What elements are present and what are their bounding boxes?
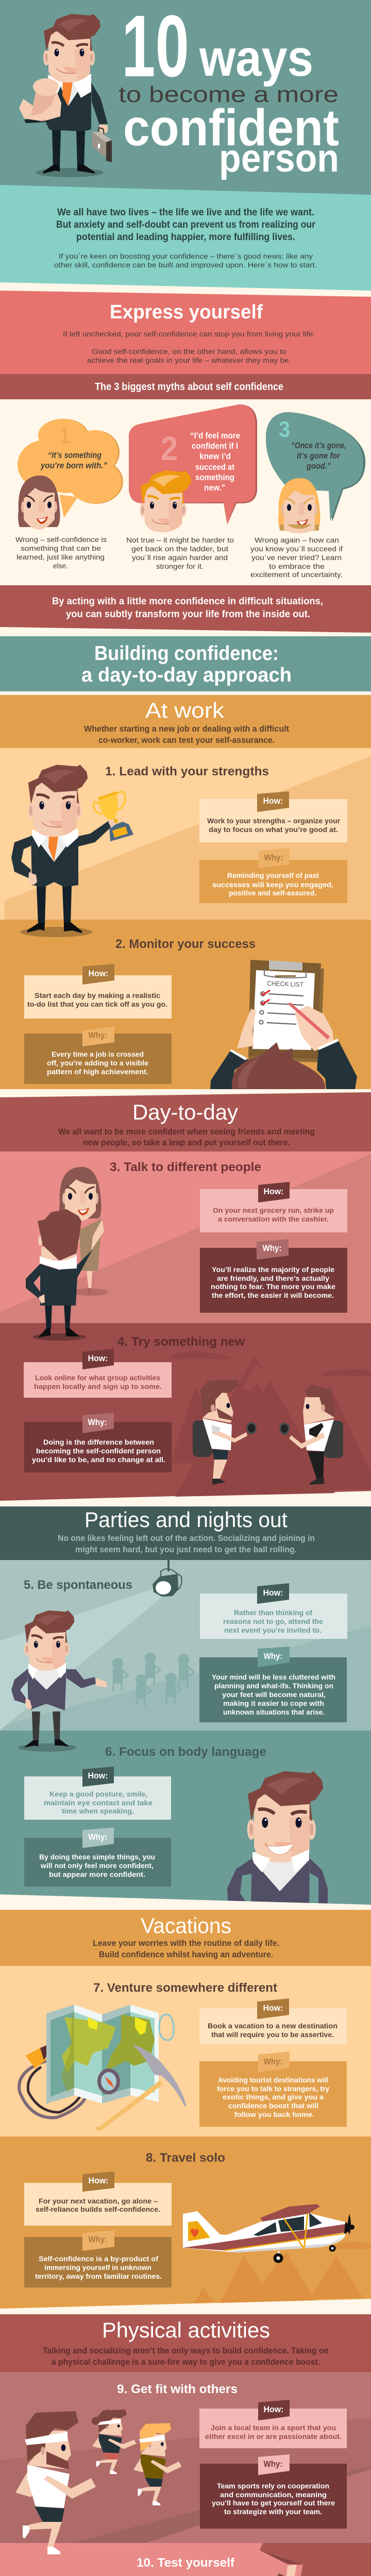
tip 1 why card: positive and self-assured. — [229, 889, 316, 897]
tip 4 why card: you’d like to be, and no change at all. — [32, 1455, 165, 1464]
myth 1 rebuttal — [15, 535, 107, 570]
tip 1 how card: How: — [263, 796, 283, 806]
tip 8 why card: territory, away from familiar routines. — [35, 2272, 162, 2280]
panel: express yourself — [0, 291, 371, 374]
tip 2 why card: Every time a job is crossed — [52, 1050, 144, 1058]
tip 5 why card: making it easier to cope with — [223, 1699, 324, 1707]
illustration: second hiker with compass — [279, 1385, 343, 1485]
section header: physical activities: Physical activities — [102, 2318, 270, 2342]
tip 10 heading: 10. Test yourself — [137, 2556, 235, 2570]
tip 7 how card: Book a vacation to a new destination — [208, 2022, 338, 2030]
tip 5 why card: your feet will become natural, — [222, 1690, 326, 1699]
tip 6 how card: maintain eye contact and take — [44, 1799, 153, 1807]
tip 6 why card: will not only feel more confident, — [40, 1861, 154, 1870]
tip 5 how card: Rather than thinking of — [234, 1608, 312, 1617]
speech bubble 2 — [129, 404, 257, 524]
mountains backdrop — [170, 1351, 371, 1497]
tip 1 why card — [199, 848, 347, 903]
section header: day-to-day: new people, so take a leap and put yourself out there. — [83, 1138, 290, 1147]
tip 9 how card — [199, 2400, 347, 2448]
tip 7 how card — [199, 1998, 347, 2044]
tip 2 why card: Why: — [89, 1030, 107, 1040]
title: confident — [123, 99, 339, 157]
cliff — [260, 2543, 371, 2576]
tip 7 how card: that will require you to be assertive. — [211, 2030, 334, 2039]
section header: vacations — [0, 1910, 371, 1966]
speech bubble 3: “Once it’s gone, — [291, 440, 346, 450]
intro body text — [54, 252, 317, 269]
speech bubble 2: “I’d feel more — [190, 431, 240, 440]
intro lead text: But anxiety and self-doubt can prevent us from realizing our — [56, 219, 316, 230]
hero businessman pointing — [19, 14, 108, 177]
panel: tip 5 be spontaneous — [0, 1560, 371, 1731]
mountains backdrop — [194, 2242, 371, 2303]
tip 1 why card: Why: — [264, 853, 283, 862]
tip 2 why card: off, you’re adding to a visible — [47, 1059, 148, 1067]
myth 2 rebuttal: stronger for it. — [156, 562, 204, 570]
tip 4 why card: Why: — [88, 1417, 107, 1427]
tip 2 how card — [24, 964, 172, 1019]
tip 4 how card: Look online for what group activities — [35, 1374, 160, 1382]
tip 3 how card — [200, 1182, 347, 1232]
speech bubble 3: 3 — [279, 417, 290, 442]
tip 5 how card: How: — [263, 1588, 283, 1598]
tip 3 why card: are friendly, and there’s actually — [217, 1274, 329, 1282]
myth 1 rebuttal: something that can be — [21, 544, 101, 552]
title: 10 — [122, 0, 189, 95]
myth 3 rebuttal: excitement of uncertainty. — [250, 570, 343, 579]
panel: hero — [0, 0, 371, 196]
section header: at work — [0, 695, 371, 748]
face: redhead man — [140, 470, 192, 532]
tip 9 how card: Join a local team in a sport that you — [211, 2424, 336, 2432]
speech bubble 3: good.” — [306, 461, 331, 471]
title: to become a more — [119, 82, 339, 107]
section header: day-to-day: We all want to be more confident when seeing friends and meeting — [58, 1127, 315, 1137]
tip 8 how card — [24, 2172, 172, 2226]
myth 3 rebuttal — [250, 536, 343, 579]
tip 2 how card: to-do list that you can tick off as you go. — [27, 1000, 167, 1008]
illustration: small airplane — [183, 2204, 355, 2263]
express yourself text: Good self-confidence, on the other hand, allows you to — [92, 347, 286, 355]
express yourself text: If left unchecked, poor self-confidence can stop you from living your life. — [63, 330, 315, 338]
express yourself text — [63, 330, 315, 364]
tip 1 how card: Work to your strengths – organize your — [207, 817, 341, 825]
illustration: smiling man close-up — [227, 1771, 328, 1906]
tip 8 how card: self-reliance builds self-confidence. — [36, 2205, 160, 2213]
illustration: woman talking — [59, 1167, 108, 1296]
section header: physical activities — [0, 2314, 371, 2372]
intro body text: other skill, confidence can be built and improved upon. Here´s how to start. — [54, 261, 317, 269]
tip 6 why card: By doing these simple things, you — [39, 1853, 155, 1861]
speech bubble 2: something — [195, 472, 234, 482]
tip 1 how card — [199, 791, 347, 842]
myth 1 rebuttal: Wrong – self-confidence is — [15, 535, 107, 544]
intro lead text: potential and leading happier, more fulfilling lives. — [76, 232, 295, 243]
illustration: map, rope, compass and ice axe — [19, 2005, 187, 2131]
tip 1 heading: 1. Lead with your strengths — [105, 765, 269, 778]
tip 3 why card: You’ll realize the majority of people — [212, 1265, 334, 1274]
panel: tip 2 monitor your success — [0, 920, 371, 1089]
panel: tip 4 try something new — [0, 1323, 371, 1501]
title: ways — [199, 29, 313, 87]
tip 5 heading: 5. Be spontaneous — [24, 1578, 132, 1592]
icon: trophy — [94, 791, 133, 841]
tip 7 heading: 7. Venture somewhere different — [93, 1981, 277, 1995]
panel: tip 10 test yourself — [0, 2543, 371, 2576]
panel: tip 8 travel solo — [0, 2137, 371, 2309]
heading: building confidence: Building confidence: — [94, 642, 279, 665]
tip 2 heading: 2. Monitor your success — [115, 937, 256, 951]
tip 7 why card: confidence boost that will — [228, 2102, 318, 2110]
face: blonde woman — [278, 478, 321, 533]
tip 2 why card — [24, 1026, 172, 1084]
tip 9 why card: you’ll have to get yourself out there — [212, 2499, 335, 2507]
tip 7 how card: How: — [263, 2003, 283, 2013]
speech bubble 2: succeed at — [195, 462, 234, 472]
tip 4 why card: Doing is the difference between — [43, 1438, 154, 1446]
tip 3 how card: On your next grocery run, strike up — [213, 1206, 334, 1214]
band: acting with confidence: you can subtly transform your life from the inside out. — [66, 609, 310, 620]
tip 3 how card: a conversation with the cashier. — [218, 1215, 329, 1223]
icon: briefcase — [92, 128, 112, 162]
tip 4 how card — [24, 1349, 172, 1398]
tip 6 how card: How: — [88, 1771, 108, 1781]
myths heading band — [0, 374, 371, 399]
tip 8 how card: For your next vacation, go alone – — [39, 2197, 158, 2205]
illustration: runner with beard — [15, 2411, 96, 2554]
tip 1 how card: day to focus on what you’re good at. — [209, 825, 338, 834]
illustration: runner woman — [92, 2410, 137, 2474]
speech bubble 3 — [266, 412, 365, 521]
myth 3 rebuttal: Wrong again – how can — [255, 536, 339, 544]
intro body text: If you´re keen on boosting your confidence – there´s good news: like any — [59, 252, 313, 260]
tip 2 how card: Start each day by making a realistic — [35, 991, 160, 999]
speech bubble 2: new.” — [204, 483, 225, 493]
panel: tip 7 venture somewhere different — [0, 1966, 371, 2137]
myth 3 rebuttal: to embrace the — [269, 562, 325, 570]
tip 9 how card: How: — [264, 2404, 283, 2414]
tip 8 heading: 8. Travel solo — [146, 2151, 225, 2165]
tip 8 how card: How: — [89, 2176, 108, 2185]
tip 7 why card: follow you back home. — [234, 2110, 314, 2119]
myth 1 — [15, 419, 123, 570]
section header: parties and nights out: might seem hard, but you just need to get the ball rolling. — [75, 1545, 297, 1554]
tip 8 why card — [24, 2230, 172, 2287]
speech bubble 1 — [18, 419, 123, 518]
heading: building confidence — [0, 636, 371, 691]
tip 9 why card: and communication, meaning — [220, 2490, 327, 2499]
myth 1 rebuttal: else. — [53, 562, 68, 570]
tip 5 why card: unknown situations that arise. — [223, 1708, 325, 1716]
tip 3 why card — [200, 1239, 347, 1313]
tip 8 why card: Why: — [89, 2234, 107, 2244]
tip 1 why card: Reminding yourself of past — [227, 871, 319, 879]
tip 6 why card: Why: — [89, 1832, 107, 1842]
tip 4 why card — [24, 1413, 172, 1472]
tip 3 heading: 3. Talk to different people — [110, 1160, 261, 1174]
tip 6 why card: but appear more confident. — [49, 1870, 145, 1878]
tip 7 why card — [199, 2052, 347, 2127]
myth 3 rebuttal: you know you´ll succeed if — [250, 545, 343, 553]
heading: building confidence: a day-to-day approach — [81, 664, 292, 686]
section header: vacations: Leave your worries with the routine of daily life. — [93, 1938, 279, 1948]
illustration: man seen from behind — [26, 1209, 93, 1341]
tip 3 why card: nothing to fear. The more you make — [211, 1282, 335, 1291]
title: person — [219, 137, 339, 180]
myth 3 rebuttal: you´ve never tried? Learn — [251, 553, 342, 562]
illustration: man holding checklist: CHECK LIST — [267, 979, 303, 988]
express yourself text: achieve the real goals in your life – whatever they may be. — [87, 356, 291, 364]
section header: vacations: Vacations — [141, 1913, 231, 1938]
tip 4 why card: becoming the self-confident person — [36, 1447, 161, 1455]
tip 5 how card: reasons not to go, attend the — [223, 1617, 323, 1625]
tip 4 heading: 4. Try something new — [117, 1335, 245, 1349]
tip 8 why card: Self-confidence is a by-product of — [39, 2255, 158, 2263]
title — [119, 0, 339, 180]
myth 3 — [250, 412, 365, 579]
band: acting with confidence — [0, 585, 371, 633]
tip 9 heading: 9. Get fit with others — [117, 2382, 238, 2396]
myth 2 rebuttal: get back on the ladder, but — [131, 545, 228, 553]
illustration: blond runner — [133, 2423, 182, 2505]
tip 6 how card — [24, 1767, 171, 1820]
section header: physical activities: a physical challenge is a sure-fire way to give you a confidence boost. — [52, 2357, 320, 2367]
speech bubble 2: 2 — [161, 429, 178, 467]
tip 3 how card: How: — [264, 1187, 283, 1196]
tip 3 why card: the effort, the easier it will become. — [212, 1291, 334, 1299]
panel: tip 6 focus on body language — [0, 1731, 371, 1906]
tip 6 heading: 6. Focus on body language — [105, 1745, 266, 1759]
illustration: bearded hiker with compass — [193, 1380, 257, 1485]
intro lead text: We all have two lives – the life we live and the life we want. — [57, 207, 314, 218]
myth 1 rebuttal: learned, just like anything — [16, 553, 105, 561]
tip 4 how card: happen locally and sign up to some. — [34, 1382, 162, 1391]
tip 5 how card: next event you’re invited to. — [224, 1626, 322, 1634]
section header: physical activities: Talking and socializing aren’t the only ways to build confidence. Taking on — [43, 2346, 329, 2355]
tip 3 why card: Why: — [263, 1243, 281, 1253]
tip 9 why card: to strategize with your team. — [224, 2507, 322, 2516]
myth 2 — [126, 404, 257, 570]
speech bubble 2: knew I’d — [199, 451, 231, 461]
tip 6 how card: Keep a good posture, smile, — [49, 1790, 147, 1798]
speech bubble 2: confident if I — [192, 441, 238, 451]
section header: day-to-day — [0, 1092, 371, 1151]
myth 2 rebuttal: Not true – it might be harder to — [126, 536, 234, 544]
speech bubble 3: it’s gone for — [297, 451, 341, 461]
myth 2 rebuttal: you´ll rise again harder and — [132, 553, 228, 562]
tip 6 how card: time when speaking. — [62, 1807, 134, 1815]
section header: at work: Whether starting a new job or dealing with a difficult — [84, 724, 289, 734]
section header: vacations: Build confidence whilst having an adventure. — [99, 1950, 273, 1959]
illustration: rock climber — [261, 2565, 368, 2576]
spotlight beam — [0, 1588, 163, 1730]
face: brunette woman — [18, 476, 60, 530]
tip 5 why card: Your mind will be less cluttered with — [212, 1673, 335, 1681]
speech bubble 1: 1 — [60, 423, 70, 448]
tip 9 why card: Why: — [264, 2459, 282, 2469]
tip 5 how card — [200, 1583, 347, 1639]
section header: parties and nights out: No one likes feeling left out of the action. Socializing and joining in — [58, 1533, 315, 1543]
myths heading band: The 3 biggest myths about self confidence — [95, 381, 283, 393]
tip 2 why card: pattern of high achievement. — [47, 1067, 148, 1076]
band: acting with confidence: By acting with a little more confidence in difficult situations, — [52, 596, 323, 607]
audience silhouettes — [112, 1653, 194, 1706]
panel: tip 3 talk to different people — [0, 1151, 371, 1323]
tip 5 why card: Why: — [264, 1651, 282, 1661]
illustration: man on stage gesturing — [11, 1611, 107, 1752]
tip 9 why card — [200, 2454, 347, 2529]
tip 8 why card: immersing yourself in unknown — [44, 2263, 151, 2272]
tip 2 how card: How: — [89, 969, 108, 978]
tip 7 why card: force you to talk to strangers, try — [217, 2084, 329, 2093]
tip 7 why card: Why: — [264, 2057, 282, 2066]
tip 1 why card: successes will keep you engaged, — [212, 880, 333, 889]
icon: stage spotlight — [153, 1560, 182, 1597]
tip 7 why card: Avoiding tourist destinations will — [218, 2076, 328, 2084]
tip 9 how card: either excel in or are passionate about. — [205, 2432, 342, 2441]
tip 4 how card: How: — [88, 1353, 108, 1363]
tip 7 why card: exotic things, and give you a — [223, 2093, 324, 2101]
section header: at work: At work — [145, 698, 225, 722]
speech bubble 1: “It’s something — [48, 450, 102, 460]
tip 5 why card — [199, 1647, 347, 1722]
section header: parties and nights out — [0, 1506, 371, 1560]
panel: tip 1 lead with your strengths — [0, 748, 371, 920]
panel: tip 9 get fit with others — [0, 2372, 371, 2543]
tip 6 why card — [24, 1827, 171, 1887]
section header: parties and nights out: Parties and nights out — [85, 1507, 288, 1532]
illustration: man holding checklist — [210, 960, 357, 1089]
panel: introduction — [0, 185, 371, 291]
tip 5 why card: planning and what-ifs. Thinking on — [214, 1682, 333, 1690]
section header: day-to-day: Day-to-day — [132, 1100, 238, 1124]
illustration: businessman with trophy — [11, 765, 133, 937]
intro lead text — [56, 207, 316, 243]
section header: at work: co-worker, work can test your self-assurance. — [98, 735, 275, 745]
speech bubble 1: you’re born with.” — [40, 461, 107, 470]
tip 9 why card: Team sports rely on cooperation — [217, 2482, 329, 2490]
heading: Express yourself — [110, 301, 263, 323]
myth 2 rebuttal — [126, 536, 234, 570]
